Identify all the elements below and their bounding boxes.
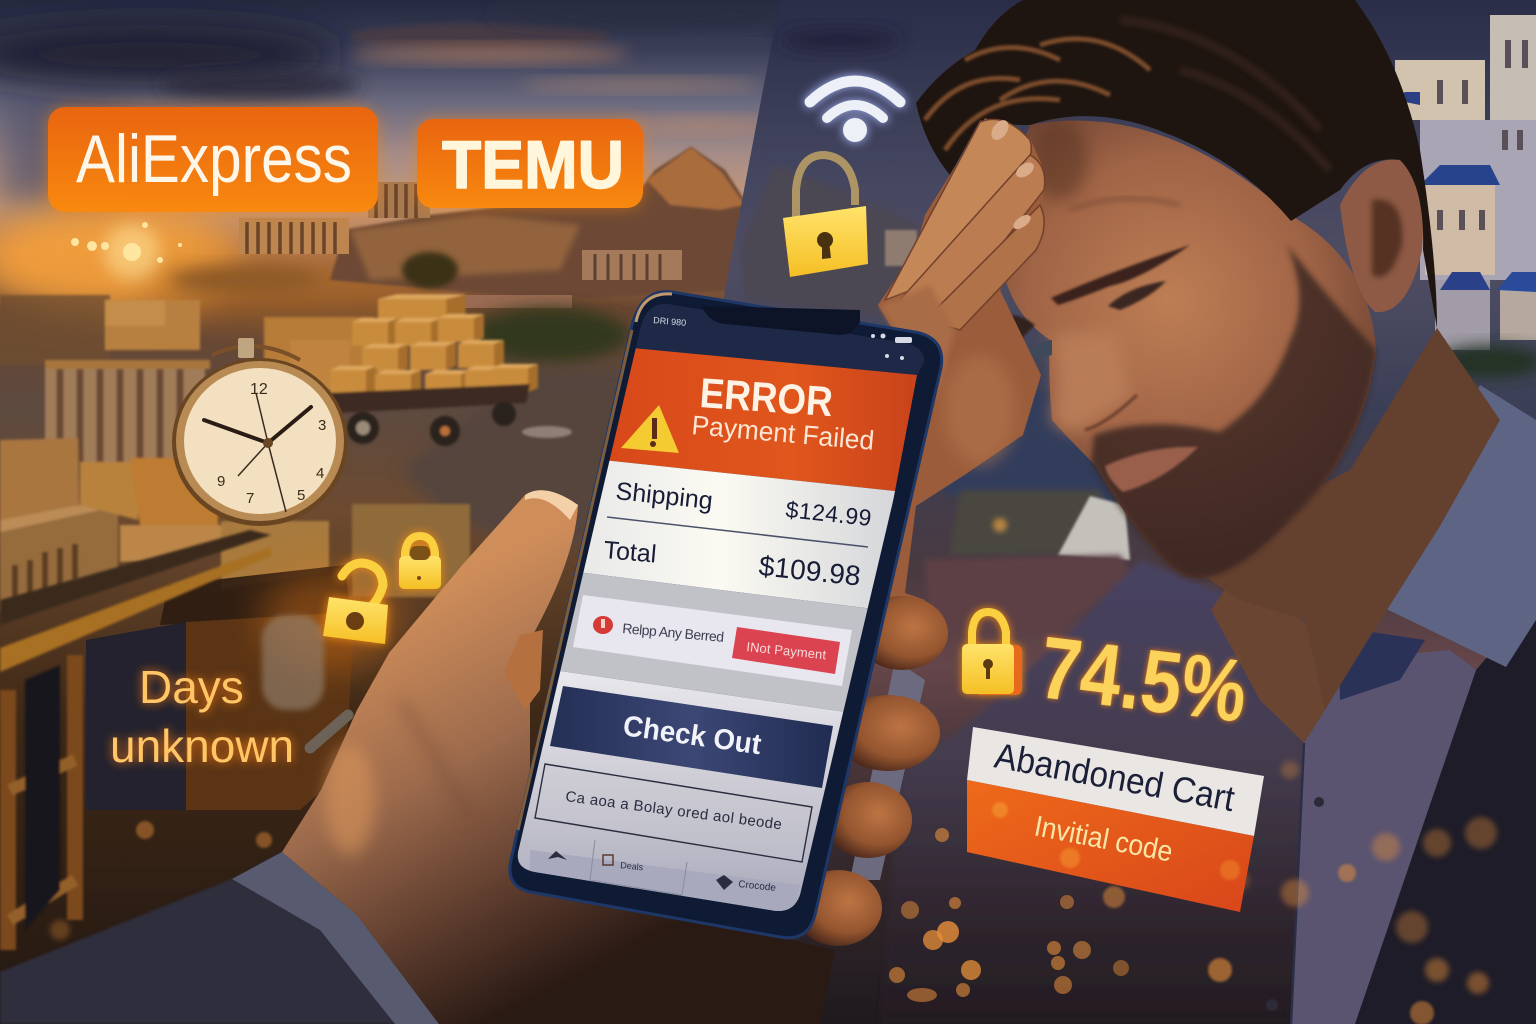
text: error: ERROR [698, 369, 834, 425]
button: not payment [732, 627, 840, 674]
text: payment failed: Payment Failed [690, 410, 875, 456]
phone body [510, 292, 942, 938]
lower panel [518, 671, 844, 911]
statistic: 74.5%: 74.5% [1035, 618, 1252, 741]
background: ground [400, 368, 640, 560]
man: hair [916, 0, 1437, 328]
row: total: $109.98 [757, 550, 862, 592]
clock [172, 338, 348, 526]
notch [702, 306, 860, 335]
man: neck [1180, 328, 1500, 710]
label: initial code [967, 780, 1254, 912]
icon: wifi signal [810, 81, 900, 142]
background: whitewashed buildings [1395, 15, 1536, 378]
dark grid band [160, 565, 350, 625]
input box [535, 764, 812, 862]
man: dark jacket right [1355, 600, 1536, 1024]
clock: 3 [318, 417, 326, 434]
button: check out: Check Out [621, 710, 763, 761]
gray band [553, 572, 873, 713]
screen top bar [636, 304, 924, 376]
holding hand: fingers [794, 596, 948, 946]
status text: DRI 980 [653, 315, 687, 328]
icon: warning triangle [621, 405, 679, 453]
background: evening sea and shore [925, 390, 1150, 640]
row: shipping: Shipping [614, 477, 714, 515]
man: face [1000, 120, 1376, 578]
alert row [573, 595, 852, 686]
input box: Ca aoa a Bolay ored aol beode [564, 788, 783, 833]
background: twilight side [640, 0, 1536, 1024]
error banner [603, 348, 917, 491]
man: ear [1340, 160, 1423, 312]
badge: TEMU: TEMU [442, 127, 624, 203]
clock: 5 [297, 487, 305, 504]
bottom navigation: Crocode [738, 879, 777, 894]
shelves and crates behind clock [0, 360, 470, 612]
row: total [602, 536, 862, 592]
debris on ground [522, 426, 572, 438]
row: shipping [614, 477, 873, 531]
clock: 4 [316, 465, 324, 482]
background: Acropolis hill and temples [170, 147, 748, 363]
stacked cardboard boxes [0, 294, 538, 446]
badge: AliExpress: AliExpress [76, 121, 352, 197]
text: days unknown: Days [139, 661, 244, 713]
man: left shoulder and chest layer [880, 560, 1310, 1024]
label: abandoned cart: Abandoned Cart [992, 735, 1238, 819]
button: check out [550, 686, 833, 788]
icon: large open padlock [783, 155, 868, 277]
alert dot [593, 616, 613, 634]
wooden table [0, 530, 271, 950]
row: total: Total [602, 536, 658, 569]
label: initial code: Invitial code [1032, 810, 1175, 869]
statistic: padlock icon [962, 612, 1022, 695]
man: shirt and collar [1211, 385, 1536, 1024]
holding hand: palm [282, 490, 835, 1024]
wrench [310, 715, 348, 748]
cuff behind fingers [850, 660, 925, 880]
button: not payment: INot Payment [746, 639, 827, 662]
text: days unknown: unknown [110, 720, 294, 772]
badge: AliExpress [48, 107, 378, 212]
fingernails [988, 117, 1037, 232]
glass jar [262, 615, 324, 710]
background: warm sunset city [0, 0, 810, 1024]
clock: 9 [217, 473, 225, 490]
clock: 12 [250, 381, 268, 398]
clock: 7 [246, 490, 254, 507]
alert text: Relpp Any Berred [622, 620, 725, 645]
bottom navigation: Deals [620, 860, 644, 872]
text: days unknown [110, 661, 294, 772]
bokeh embers [50, 761, 1497, 1024]
sleeve of holding arm [0, 852, 439, 1024]
bottom navigation [548, 840, 777, 895]
man: lips [1105, 447, 1198, 492]
status icons [871, 334, 912, 360]
nav bar [530, 850, 796, 911]
backdrop behind days label [86, 570, 400, 810]
icon: closed padlock left [399, 536, 441, 589]
man: raised hand and forearm [878, 117, 1045, 640]
city lights [71, 222, 182, 280]
man: beard [1091, 245, 1376, 578]
icon: open padlock left [323, 563, 388, 644]
shipping panel [577, 460, 895, 609]
row: shipping: $124.99 [784, 496, 873, 531]
phone [500, 290, 942, 938]
